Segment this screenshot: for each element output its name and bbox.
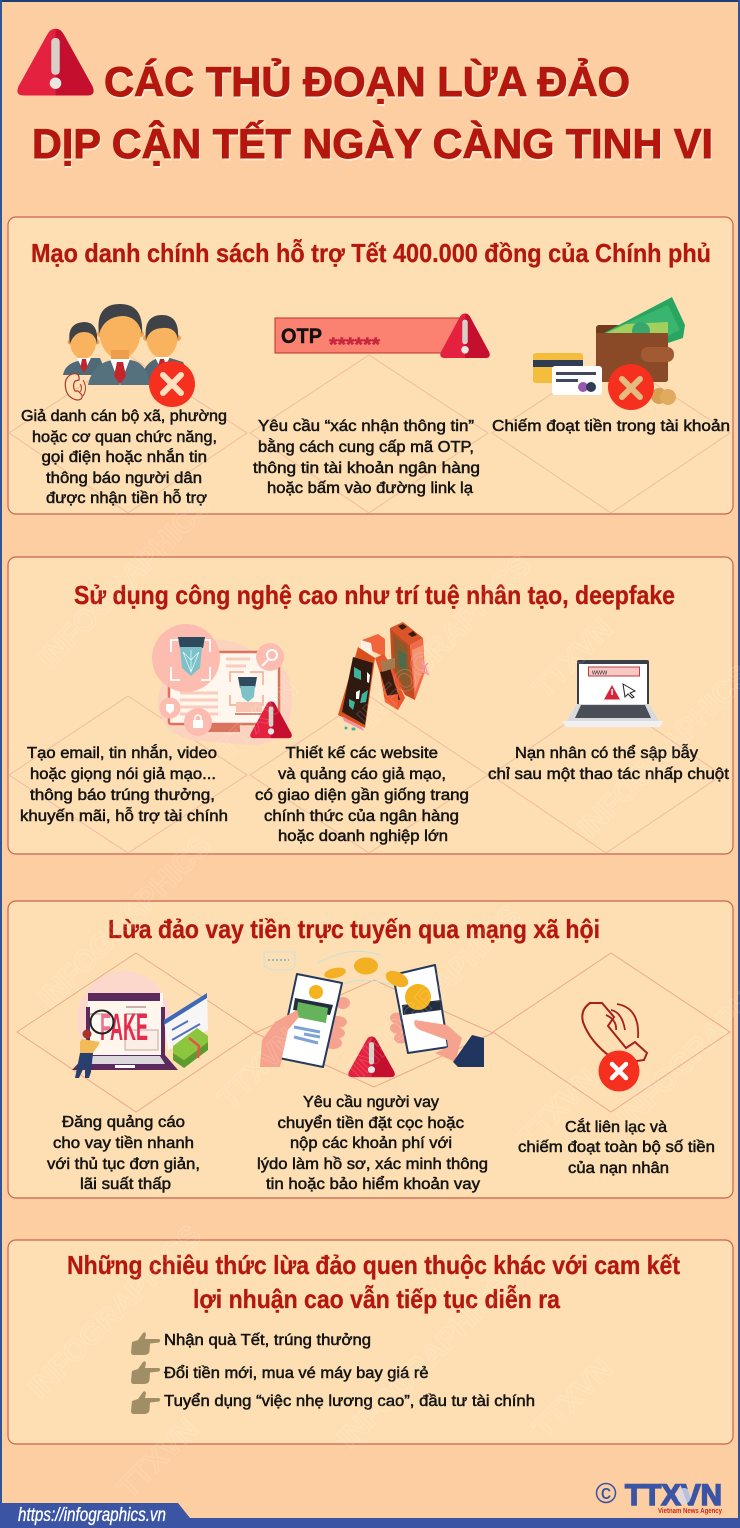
- text: INFOGRAPHICS: [32, 489, 218, 675]
- panel: other familiar scams: [8, 1240, 733, 1444]
- title: DỊP CẬN TẾT NGÀY CÀNG TINH VI: [32, 119, 713, 167]
- text: column 2: bằng cách cung cấp mã OTP,: [258, 439, 474, 456]
- text: column 1: [47, 1114, 200, 1193]
- icon: laptop with link warning: [562, 660, 663, 727]
- icon: deepfake face scan: [152, 624, 292, 745]
- title: DỊP CẬN TẾT NGÀY CÀNG TINH VI: [33, 121, 714, 169]
- icon: fake advert on laptop: [72, 971, 208, 1078]
- text: column 1: khuyến mãi, hỗ trợ tài chính: [20, 808, 228, 825]
- logo: TTXVN copyright: C: [601, 1486, 611, 1503]
- text: column 2: thông tin tài khoản ngân hàng: [253, 460, 480, 477]
- text: column 2: lýdo làm hồ sơ, xác minh thông: [257, 1156, 488, 1173]
- text: column 3: [488, 745, 730, 783]
- text: column 1: hoặc giọng nói giả mạo...: [30, 766, 216, 783]
- text: INFOGRAPHICS: [22, 1219, 208, 1405]
- text: column 1: Tạo email, tin nhắn, video: [27, 745, 217, 762]
- text: column 3: Cắt liên lạc và: [565, 1119, 667, 1136]
- text: TTXVN: [212, 672, 304, 765]
- text: column 2: hoặc bấm vào đường link lạ: [267, 480, 473, 497]
- icon: laptop with link warning: www: [591, 670, 608, 676]
- text: column 1: [21, 408, 227, 507]
- text: column 2: Yêu cầu “xác nhận thông tin”: [258, 418, 474, 435]
- logo: TTXVN copyright: TTXVN: [625, 1479, 722, 1512]
- text: INFOGRAPHICS: [332, 1269, 518, 1455]
- text: TTXVN: [112, 1412, 204, 1505]
- text: column 1: lãi suất thấp: [80, 1176, 171, 1193]
- text: column 1: được nhận tiền hỗ trợ: [46, 490, 207, 507]
- text: column 1: [20, 745, 228, 825]
- text: column 3: Nạn nhân có thể sập bẫy: [515, 745, 698, 762]
- bullet: new money, cheap tickets: Đổi tiền mới, mua vé máy bay giá rẻ: [164, 1365, 428, 1382]
- title: CÁC THỦ ĐOẠN LỪA ĐẢO: [105, 59, 631, 107]
- heading: Những chiêu thức lừa đảo quen thuộc khác với cam kết: [67, 1250, 680, 1280]
- icon: three officials: [63, 304, 195, 407]
- bullet: new money, cheap tickets: [131, 1361, 428, 1384]
- text: column 2: [257, 1094, 488, 1193]
- footer bar with website: https://infographics.vn: [18, 1505, 166, 1526]
- icon: title warning triangle: [17, 29, 94, 95]
- letter I block: [390, 622, 428, 700]
- heading: Lừa đảo vay tiền trực tuyến qua mạng xã hội: [108, 914, 600, 944]
- text: column 1: gọi điện hoặc nhắn tin: [42, 449, 207, 466]
- panel: online loan scams: [8, 901, 733, 1198]
- icon: wallet and cards: [533, 297, 685, 410]
- text: TTXVN: [212, 1022, 304, 1115]
- text: column 2: [255, 745, 469, 845]
- text: TTXVN: [527, 612, 619, 705]
- text: column 2: Yêu cầu người vay: [303, 1094, 439, 1111]
- text: column 1: Đăng quảng cáo: [62, 1114, 185, 1131]
- letter A block: [338, 634, 405, 731]
- text: TTXVN: [512, 1062, 604, 1155]
- icon: isometric AI letters: [338, 622, 428, 731]
- text: column 2: có giao diện gần giống trang: [255, 787, 469, 804]
- text: column 2: và quảng cáo giả mạo,: [278, 766, 446, 783]
- text: INFOGRAPHICS: [342, 899, 528, 1085]
- text: column 2: hoặc doanh nghiệp lớn: [278, 828, 448, 845]
- text: column 2: chuyển tiền đặt cọc hoặc: [278, 1115, 464, 1132]
- text: column 3: Chiếm đoạt tiền trong tài khoản: [492, 418, 730, 435]
- icon: OTP bar with warning: OTP: [281, 325, 322, 348]
- text: column 2: nộp các khoản phí với: [290, 1135, 452, 1152]
- heading: lợi nhuận cao vẫn tiếp tục diễn ra: [193, 1284, 560, 1314]
- text: column 2: Thiết kế các website: [286, 745, 438, 762]
- text: INFOGRAPHICS: [352, 549, 538, 735]
- text: column 2: [253, 418, 480, 497]
- text: column 1: hoặc cơ quan chức năng,: [32, 429, 217, 446]
- text: column 3: [518, 1119, 715, 1177]
- text: INFOGRAPHICS: [32, 829, 218, 1015]
- icon: fake advert on laptop: FAKE: [100, 1007, 148, 1049]
- panel: impersonating government support: [8, 217, 733, 514]
- text: TTXVN: [527, 1352, 619, 1445]
- text: column 1: thông báo trúng thưởng,: [30, 787, 215, 804]
- text: column 3: của nạn nhân: [568, 1160, 669, 1177]
- bullet: Tet gifts: [131, 1332, 371, 1355]
- footer bar with website: [0, 1503, 740, 1528]
- text: column 3: chiếm đoạt toàn bộ số tiền: [518, 1139, 715, 1156]
- title: [17, 29, 714, 169]
- bullet: easy jobs, investment: Tuyển dụng “việc nhẹ lương cao”, đầu tư tài chính: [164, 1393, 535, 1410]
- text: column 1: với thủ tục đơn giản,: [47, 1156, 200, 1173]
- text: column 3: chỉ sau một thao tác nhấp chuột: [488, 766, 730, 783]
- bullet: easy jobs, investment: [131, 1391, 535, 1414]
- icon: OTP bar with warning: [275, 314, 490, 358]
- title: CÁC THỦ ĐOẠN LỪA ĐẢO: [104, 57, 630, 105]
- panel: high technology, AI, deepfake: [8, 557, 733, 854]
- text: column 1: cho vay tiền nhanh: [53, 1135, 194, 1152]
- heading: [67, 1250, 680, 1314]
- text: column 1: Giả danh cán bộ xã, phường: [21, 408, 227, 425]
- heading: Sử dụng công nghệ cao như trí tuệ nhân tạo, deepfake: [74, 580, 675, 610]
- text: column 2: tin hoặc bảo hiểm khoản vay: [266, 1176, 480, 1193]
- icon: OTP bar with warning: ******: [329, 335, 381, 356]
- logo: TTXVN copyright: Vietnam News Agency: [658, 1508, 722, 1515]
- icon: phone with cross: [582, 1003, 647, 1092]
- text: column 2: chính thức của ngân hàng: [264, 808, 459, 825]
- bullet: Tet gifts: Nhận quà Tết, trúng thưởng: [164, 1332, 371, 1349]
- icon: money transfer phones: [260, 951, 484, 1077]
- text: column 1: thông báo người dân: [46, 470, 202, 487]
